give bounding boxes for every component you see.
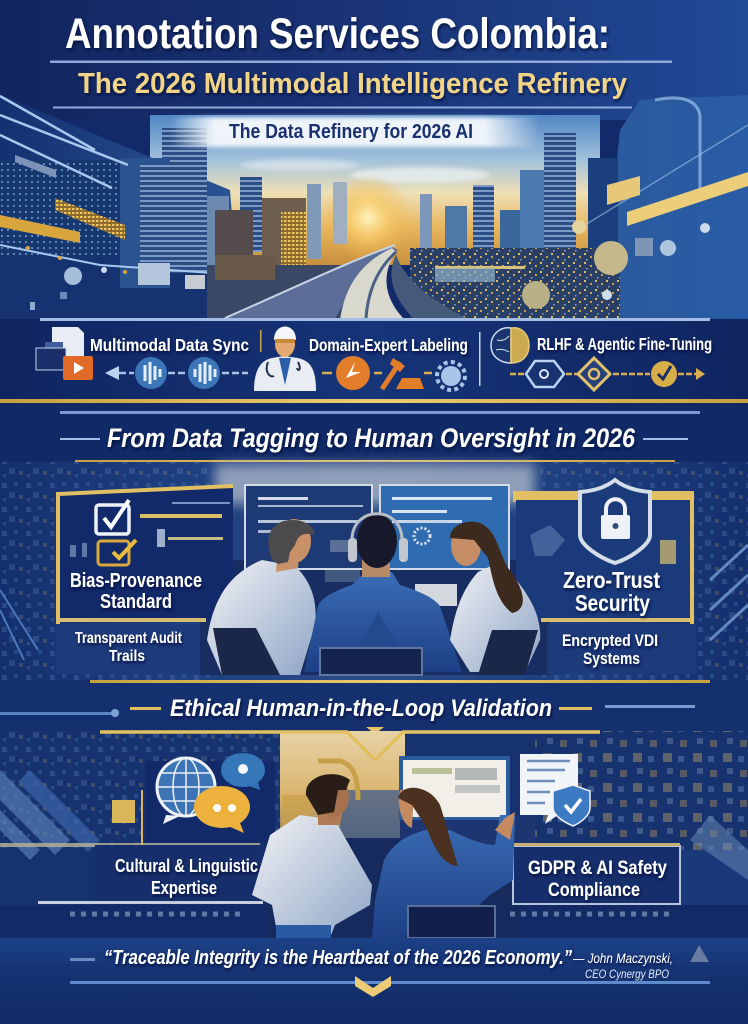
attribution: CEO Cynergy BPO [585,967,669,981]
icon: shield and padlock [580,480,650,563]
attribution [572,950,673,981]
panel: cultural and linguistic expertise: Expertise [151,877,217,898]
icon: documents and video [36,327,93,380]
attribution: — John Maczynski, [572,950,673,966]
step: domain-expert labeling [254,326,468,391]
section heading: from data tagging [0,403,748,476]
panel: zero-trust security [513,480,694,629]
team scene [0,462,748,680]
icon: pipeline nodes [510,358,705,390]
title: Annotation Services Colombia: [65,10,610,58]
panel: transparent audit trails: Transparent Audit [75,630,182,647]
section heading: ethical validation: Ethical Human-in-the-Loop Validation [170,695,552,722]
gold frame chevron [100,732,600,760]
left city block [0,95,240,320]
panel: bias-provenance standard: Bias-Provenance [70,570,202,592]
panel: gdpr and ai safety compliance: Compliance [548,879,640,901]
panel: encrypted vdi systems: Systems [583,649,640,668]
section heading: from data tagging: From Data Tagging to Human Oversight in 2026 [107,423,636,453]
cable [318,761,358,800]
person: woman in blue jacket [372,788,515,938]
icon: flow arrow with waveforms [105,357,248,389]
quote text: “Traceable Integrity is the Heartbeat of the 2026 Economy.” [104,947,572,969]
monitors [245,485,509,606]
step: multimodal data sync: Multimodal Data Sync [90,335,249,355]
center skyline [207,174,525,320]
step: rlhf and agentic fine-tuning [491,328,712,390]
icon: label tools and gear [322,356,465,390]
panel: cultural and linguistic expertise: Cultural & Linguistic [115,855,258,876]
icon: compliance document with shield [520,754,590,826]
icon: brain [491,328,529,363]
panel: cultural and linguistic expertise [38,845,265,905]
header band [0,0,748,120]
validation scene [0,731,748,939]
panel: quote band [0,938,748,1024]
panel: gdpr and ai safety compliance [513,843,680,904]
person: man in white shirt [252,774,372,939]
highway [225,245,470,320]
diagonal tech shapes [0,770,70,860]
section heading: ethical validation [0,680,748,734]
panel: transparent audit trails [56,624,200,674]
monitor on the wall [399,756,510,820]
panel: zero-trust security: Zero-Trust [563,567,660,593]
panel: process bar [0,318,748,403]
person: woman in lab coat [450,522,540,675]
panel: gdpr and ai safety compliance: GDPR & AI Safety [528,857,667,879]
icon: bottom chevron [355,976,391,997]
person: man with headset [304,514,462,675]
icon: globe with speech bubbles [141,753,275,845]
panel: encrypted vdi systems: Encrypted VDI [562,631,658,650]
panel: bias-provenance standard [56,486,233,628]
panel: zero-trust security: Security [575,590,650,616]
people at monitors [207,514,540,675]
icon: doctor in hard hat [254,326,316,391]
right city block [410,95,748,320]
panel: encrypted vdi systems [547,624,696,674]
panel: transparent audit trails: Trails [109,648,145,665]
band: data refinery label [170,117,540,147]
icon: checkboxes [70,500,230,565]
step: domain-expert labeling: Domain-Expert Labeling [309,335,468,355]
sky [150,115,600,265]
band: data refinery label: The Data Refinery for 2026 AI [229,121,473,143]
panel: bias-provenance standard: Standard [100,591,172,613]
subtitle: The 2026 Multimodal Intelligence Refinery [78,68,627,100]
step: multimodal data sync [36,327,262,389]
person: man in lab coat [207,519,316,675]
city scene [0,95,748,320]
